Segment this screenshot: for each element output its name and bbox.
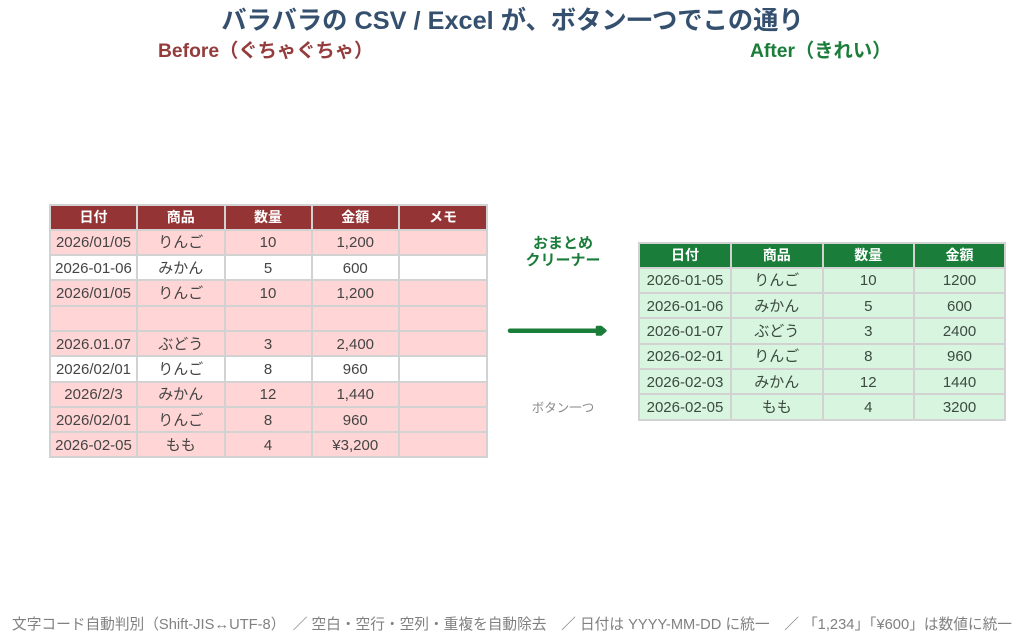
footer note: 文字コード自動判別（Shift-JIS↔UTF-8） ／ 空白・空行・空列・重複を自動除去 ／ 日付は YYYY-MM-DD に統一 ／ 「1,234」「¥600」は数値に統一 xyxy=(12,617,1012,633)
table: after (clean data): みかん xyxy=(754,374,799,391)
table: before (messy data): 2026/02/01 xyxy=(56,361,131,378)
table: before (messy data): メモ xyxy=(429,209,457,225)
table: after (clean data): 金額 xyxy=(946,247,974,263)
table: before (messy data): 2026-02-05 xyxy=(55,437,132,454)
table: after (clean data): 8 xyxy=(864,348,872,365)
table: after (clean data): 商品 xyxy=(763,247,791,263)
table: before (messy data): 日付 xyxy=(80,209,108,225)
heading: before: Before（ぐちゃぐちゃ） xyxy=(158,41,373,62)
heading: after: After（きれい） xyxy=(750,41,891,62)
table: after (clean data): 数量 xyxy=(854,247,882,263)
caption: one button: ボタン一つ xyxy=(532,401,594,415)
table: before (messy data): ぶどう xyxy=(158,336,203,353)
table: before (messy data): 960 xyxy=(343,412,368,429)
table: after (clean data): 10 xyxy=(860,272,877,289)
table: after (clean data): りんご xyxy=(754,272,799,289)
table: before (messy data): りんご xyxy=(158,234,203,251)
table: before (messy data): 4 xyxy=(264,437,272,454)
table: before (messy data): 2026/01/05 xyxy=(56,234,131,251)
table: before (messy data): 3 xyxy=(264,336,272,353)
table: after (clean data): 2026-01-06 xyxy=(647,298,723,315)
table: after (clean data): りんご xyxy=(754,348,799,365)
title: バラバラの CSV / Excel が、ボタン一つでこの通り xyxy=(221,7,804,35)
table: after (clean data): 600 xyxy=(947,298,972,315)
table: before (messy data): 1,440 xyxy=(336,386,374,403)
label: tool name: おまとめ xyxy=(533,235,593,252)
table: after (clean data) xyxy=(638,242,1006,421)
label: tool name: クリーナー xyxy=(525,252,600,269)
table: before (messy data): 数量 xyxy=(254,209,282,225)
arrow xyxy=(508,326,607,336)
table: before (messy data): 600 xyxy=(343,260,368,277)
table: after (clean data): 2026-02-01 xyxy=(647,348,723,365)
table: before (messy data): 1,200 xyxy=(336,234,374,251)
table: before (messy data): 1,200 xyxy=(336,285,374,302)
table: after (clean data): 12 xyxy=(860,374,877,391)
table: before (messy data): 2026-01-06 xyxy=(55,260,132,277)
table: before (messy data): ¥3,200 xyxy=(332,437,378,454)
table: before (messy data): もも xyxy=(166,437,196,454)
table: before (messy data): 2026.01.07 xyxy=(56,336,131,353)
table: after (clean data): 2026-01-05 xyxy=(647,272,723,289)
table: before (messy data): 2026/02/01 xyxy=(56,412,131,429)
table: after (clean data): 960 xyxy=(947,348,972,365)
table: before (messy data): 商品 xyxy=(167,209,195,225)
table: after (clean data): もも xyxy=(762,399,792,416)
table: before (messy data): みかん xyxy=(158,386,203,403)
table: before (messy data): 10 xyxy=(260,285,276,302)
table: after (clean data): 3200 xyxy=(943,399,976,416)
table: before (messy data): 2,400 xyxy=(336,336,374,353)
table: before (messy data): りんご xyxy=(158,361,203,378)
table: before (messy data): 5 xyxy=(264,260,272,277)
table: after (clean data): 2400 xyxy=(943,323,976,340)
table: before (messy data): 8 xyxy=(264,412,272,429)
table: after (clean data): 5 xyxy=(864,298,872,315)
table: after (clean data): 日付 xyxy=(671,247,699,263)
table: before (messy data): りんご xyxy=(158,285,203,302)
table: before (messy data): 2026/2/3 xyxy=(64,386,123,403)
table: before (messy data): りんご xyxy=(158,412,203,429)
table: after (clean data): 2026-02-03 xyxy=(647,374,723,391)
table: before (messy data): 2026/01/05 xyxy=(56,285,131,302)
table: after (clean data): 2026-02-05 xyxy=(647,399,723,416)
table: after (clean data): 1200 xyxy=(943,272,976,289)
table: after (clean data): 4 xyxy=(864,399,872,416)
label: tool name xyxy=(525,235,600,269)
table: before (messy data): 960 xyxy=(343,361,368,378)
table: before (messy data): 8 xyxy=(264,361,272,378)
table: before (messy data): みかん xyxy=(158,260,203,277)
table: after (clean data): ぶどう xyxy=(754,323,799,340)
table: before (messy data): 10 xyxy=(260,234,276,251)
table: after (clean data): 2026-01-07 xyxy=(647,323,723,340)
table: before (messy data): 12 xyxy=(260,386,276,403)
table: after (clean data): みかん xyxy=(754,298,799,315)
table: before (messy data): 金額 xyxy=(341,209,369,225)
table: after (clean data): 3 xyxy=(864,323,872,340)
table: after (clean data): 1440 xyxy=(943,374,976,391)
table: before (messy data) xyxy=(49,204,488,458)
